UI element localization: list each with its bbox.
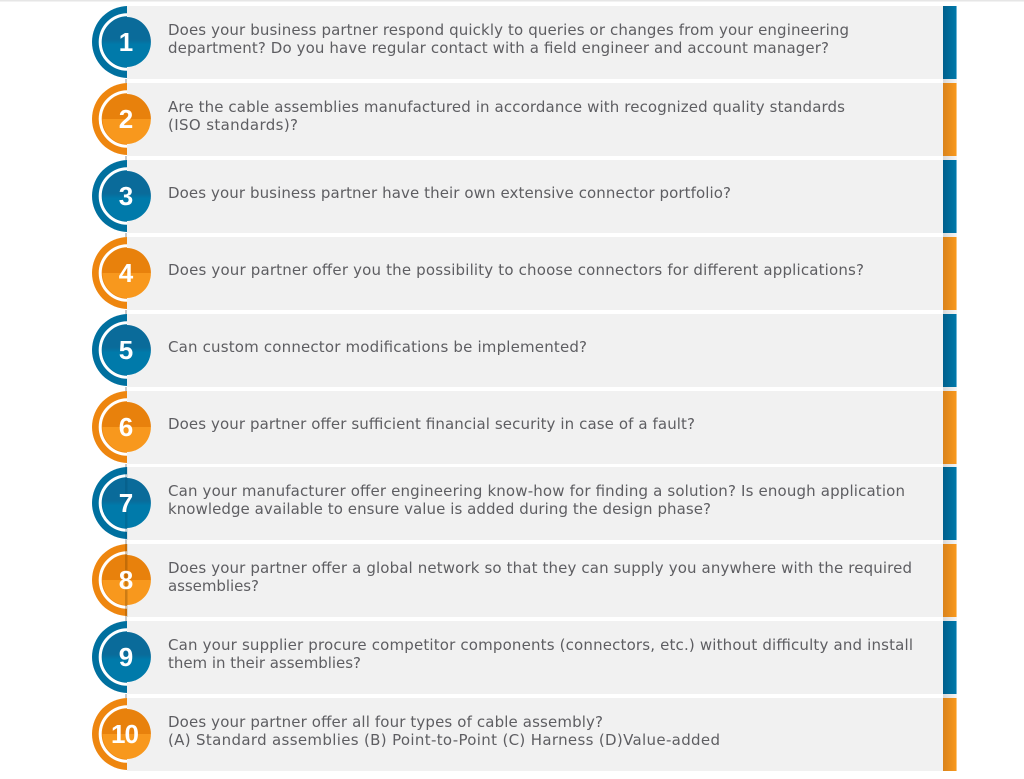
panel 10 <box>127 698 943 771</box>
side bar 6 <box>943 391 957 464</box>
question 3: Does your business partner have their own extensive connector portfolio? <box>168 184 731 202</box>
question 1: Does your business partner respond quickly to queries or changes from your engineering <box>168 21 849 39</box>
number badge 6 <box>92 391 151 463</box>
question 8 <box>168 559 912 595</box>
row 3 <box>92 160 957 233</box>
question 7: Can your manufacturer offer engineering know-how for finding a solution? Is enough application <box>168 482 905 500</box>
panel 4 <box>127 237 943 310</box>
side bar 2 <box>943 83 957 156</box>
number badge 5 <box>92 314 151 386</box>
row 1 <box>92 6 957 79</box>
question 10: Does your partner offer all four types of cable assembly? <box>168 713 603 731</box>
question 9 <box>168 636 913 672</box>
row 8 <box>92 544 957 617</box>
question 10 <box>168 713 720 749</box>
panel 8 <box>127 544 943 617</box>
question 9: them in their assemblies? <box>168 654 361 672</box>
number badge 1 <box>92 6 151 78</box>
row 6 <box>92 391 957 464</box>
question 9: Can your supplier procure competitor components (connectors, etc.) without difficulty and install <box>168 636 913 654</box>
row 7 <box>92 467 957 540</box>
number badge 2 <box>92 83 151 155</box>
row 10 <box>92 698 957 771</box>
side bar 5 <box>943 314 957 387</box>
panel 1 <box>127 6 943 79</box>
number badge 10: 10 <box>111 719 138 749</box>
question 4: Does your partner offer you the possibility to choose connectors for different applications? <box>168 261 864 279</box>
number badge 5: 5 <box>119 335 133 365</box>
side bar 3 <box>943 160 957 233</box>
row 5 <box>92 314 957 387</box>
number badge 1: 1 <box>119 27 133 57</box>
panel 7 <box>127 467 943 540</box>
panel 9 <box>127 621 943 694</box>
question 2 <box>168 98 845 134</box>
side bar 1 <box>943 6 957 79</box>
question 6: Does your partner offer sufficient financial security in case of a fault? <box>168 415 695 433</box>
question 8: assemblies? <box>168 577 259 595</box>
number badge 2: 2 <box>119 104 133 134</box>
panel 5 <box>127 314 943 387</box>
number badge 9: 9 <box>119 642 133 672</box>
question 10: (A) Standard assemblies (B) Point-to-Point (C) Harness (D)Value-added <box>168 731 720 749</box>
question 2: (ISO standards)? <box>168 116 298 134</box>
question 1: department? Do you have regular contact with a field engineer and account manager? <box>168 39 829 57</box>
question 8: Does your partner offer a global network so that they can supply you anywhere with the required <box>168 559 912 577</box>
side bar 8 <box>943 544 957 617</box>
number badge 6: 6 <box>119 412 133 442</box>
number badge 3: 3 <box>119 181 133 211</box>
panel 6 <box>127 391 943 464</box>
side bar 4 <box>943 237 957 310</box>
question 2: Are the cable assemblies manufactured in accordance with recognized quality standards <box>168 98 845 116</box>
row 9 <box>92 621 957 694</box>
number badge 7 <box>92 467 151 540</box>
number badge 3 <box>92 160 151 232</box>
row 2 <box>92 83 957 156</box>
number badge 10 <box>92 698 151 770</box>
side bar 7 <box>943 467 957 540</box>
question 7: knowledge available to ensure value is added during the design phase? <box>168 500 711 518</box>
question 5: Can custom connector modifications be implemented? <box>168 338 587 356</box>
number badge 8 <box>92 544 151 617</box>
row 4 <box>92 237 957 310</box>
number badge 4: 4 <box>119 258 134 288</box>
number badge 8: 8 <box>119 565 133 595</box>
panel 3 <box>127 160 943 233</box>
number badge 9 <box>92 621 151 693</box>
question 1 <box>168 21 849 57</box>
side bar 9 <box>943 621 957 694</box>
question 7 <box>168 482 905 518</box>
number badge 4 <box>92 237 151 309</box>
panel 2 <box>127 83 943 156</box>
number badge 7: 7 <box>119 488 133 518</box>
side bar 10 <box>943 698 957 771</box>
